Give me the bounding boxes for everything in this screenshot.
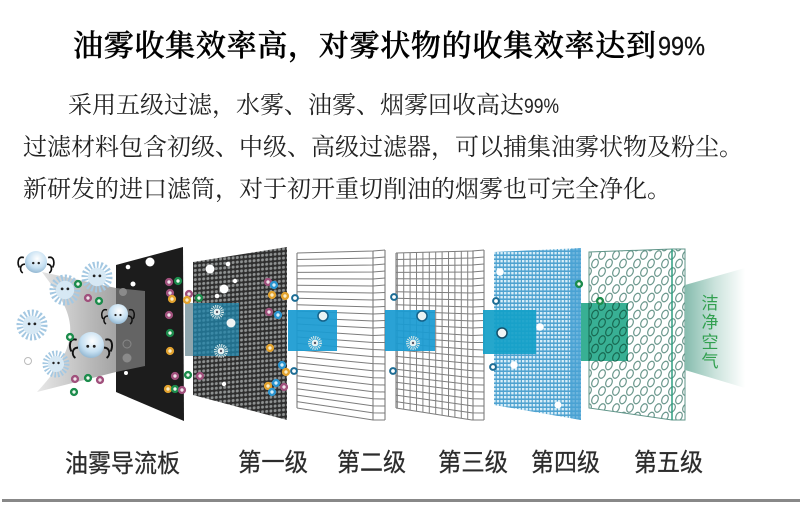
intro text block xyxy=(23,92,743,203)
dirty air cone xyxy=(37,272,145,392)
filter stage 1 panel xyxy=(185,247,287,420)
filter stage 5 panel xyxy=(581,249,685,420)
clean air label: 空 xyxy=(702,333,718,352)
intro text block: 过滤材料包含初级、中级、高级过滤器，可以捕集油雾状物及粉尘。 xyxy=(23,134,743,161)
clean air label xyxy=(702,294,718,371)
stage labels xyxy=(65,449,703,478)
intro text block: 采用五级过滤，水雾、油雾、烟雾回收高达 xyxy=(68,92,524,119)
stage labels: 第一级 xyxy=(238,449,308,477)
stage labels: 第三级 xyxy=(438,449,508,477)
stage labels: 第四级 xyxy=(531,449,600,477)
clean air label: 洁 xyxy=(702,294,718,313)
clean air label: 净 xyxy=(702,313,718,332)
clean air label: 气 xyxy=(702,352,718,371)
filter diagram xyxy=(18,247,745,421)
filter stage 2 panel xyxy=(288,250,385,420)
contaminant germs xyxy=(18,251,134,373)
stage labels: 第五级 xyxy=(634,449,703,477)
oil mist deflector panel xyxy=(116,247,184,421)
filter stage 4 panel xyxy=(483,248,581,420)
stage labels: 油雾导流板 xyxy=(65,450,180,478)
stage labels: 第二级 xyxy=(337,449,406,477)
title: 99% xyxy=(658,31,705,61)
title: 油雾收集效率高，对雾状物的收集效率达到 xyxy=(73,30,657,64)
intro text block: 99% xyxy=(524,95,559,118)
clean air cone xyxy=(685,268,745,388)
filter stage 3 panel xyxy=(385,250,484,420)
particle rings xyxy=(67,278,603,395)
intro text block: 新研发的进口滤筒，对于初开重切削油的烟雾也可完全净化。 xyxy=(23,176,671,203)
